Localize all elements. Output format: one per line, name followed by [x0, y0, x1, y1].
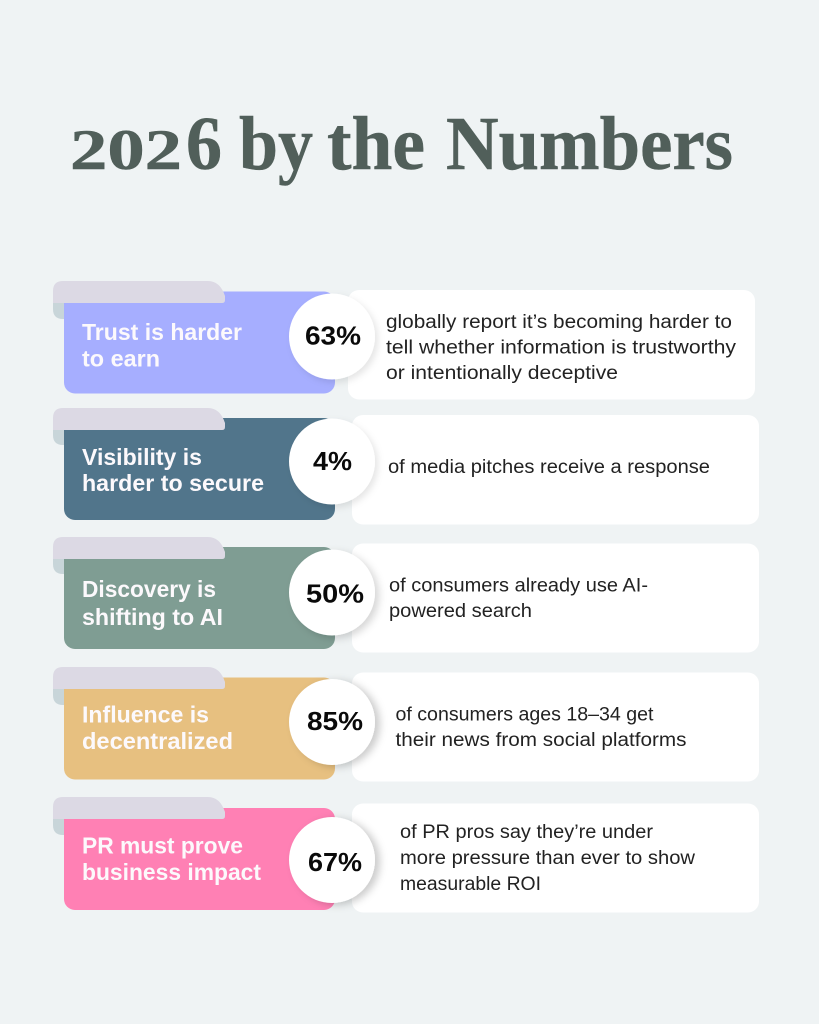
heading: PR must prove	[82, 832, 243, 858]
title: Numbers	[446, 102, 733, 186]
description: of consumers ages 18–34 get	[396, 704, 654, 726]
heading: business impact	[82, 859, 261, 885]
folder tab	[53, 667, 225, 689]
tab shadow	[53, 295, 70, 319]
percentage circle	[289, 418, 375, 504]
tab shadow	[53, 420, 70, 445]
folder tab	[53, 281, 225, 303]
heading: harder to secure	[82, 470, 264, 496]
description: powered search	[389, 601, 532, 622]
label panel	[64, 808, 335, 910]
heading: shifting to AI	[82, 604, 223, 630]
title: the	[327, 102, 425, 186]
heading: Visibility is	[82, 444, 202, 470]
heading: Trust is harder	[82, 319, 242, 345]
title: 202	[70, 119, 182, 182]
row 5: business impact	[53, 797, 759, 912]
heading: Discovery is	[82, 576, 216, 602]
label panel	[64, 292, 335, 394]
row 2: visibility	[53, 408, 759, 524]
description: of consumers already use AI-	[389, 576, 648, 596]
heading: decentralized	[82, 728, 233, 754]
tab shadow	[53, 809, 70, 835]
description: or intentionally deceptive	[386, 363, 618, 384]
description: of media pitches receive a response	[388, 457, 710, 478]
statistic: 67%	[308, 847, 362, 877]
folder tab	[53, 797, 225, 819]
percentage circle	[289, 817, 375, 903]
label panel	[64, 678, 335, 780]
tab shadow	[53, 549, 70, 574]
percentage circle	[289, 550, 375, 636]
description: of PR pros say they’re under	[400, 822, 654, 843]
description: their news from social platforms	[396, 730, 686, 751]
percentage circle	[289, 294, 375, 380]
statistic: 50%	[306, 578, 364, 608]
row 3: discovery	[53, 537, 759, 652]
description card	[348, 290, 755, 400]
percentage circle	[289, 679, 375, 765]
description card	[352, 415, 759, 524]
description: tell whether information is trustworthy	[386, 338, 737, 358]
description: measurable ROI	[400, 874, 541, 895]
statistic: 63%	[305, 320, 361, 350]
heading: to earn	[82, 346, 160, 372]
title: 6	[186, 102, 222, 186]
statistic: 85%	[307, 706, 363, 736]
description: globally report it’s becoming harder to	[386, 312, 732, 333]
description card	[352, 544, 759, 652]
heading: Influence is	[82, 702, 209, 728]
label panel	[64, 418, 335, 520]
description card	[352, 804, 759, 912]
description: more pressure than ever to show	[400, 848, 695, 869]
row 4: influence	[53, 667, 759, 782]
statistic: 4%	[313, 446, 352, 476]
tab shadow	[53, 679, 70, 705]
folder tab	[53, 537, 225, 559]
description card	[352, 672, 759, 782]
title: by	[239, 102, 313, 186]
label panel	[64, 547, 335, 649]
row 1: trust	[53, 281, 755, 400]
folder tab	[53, 408, 225, 430]
